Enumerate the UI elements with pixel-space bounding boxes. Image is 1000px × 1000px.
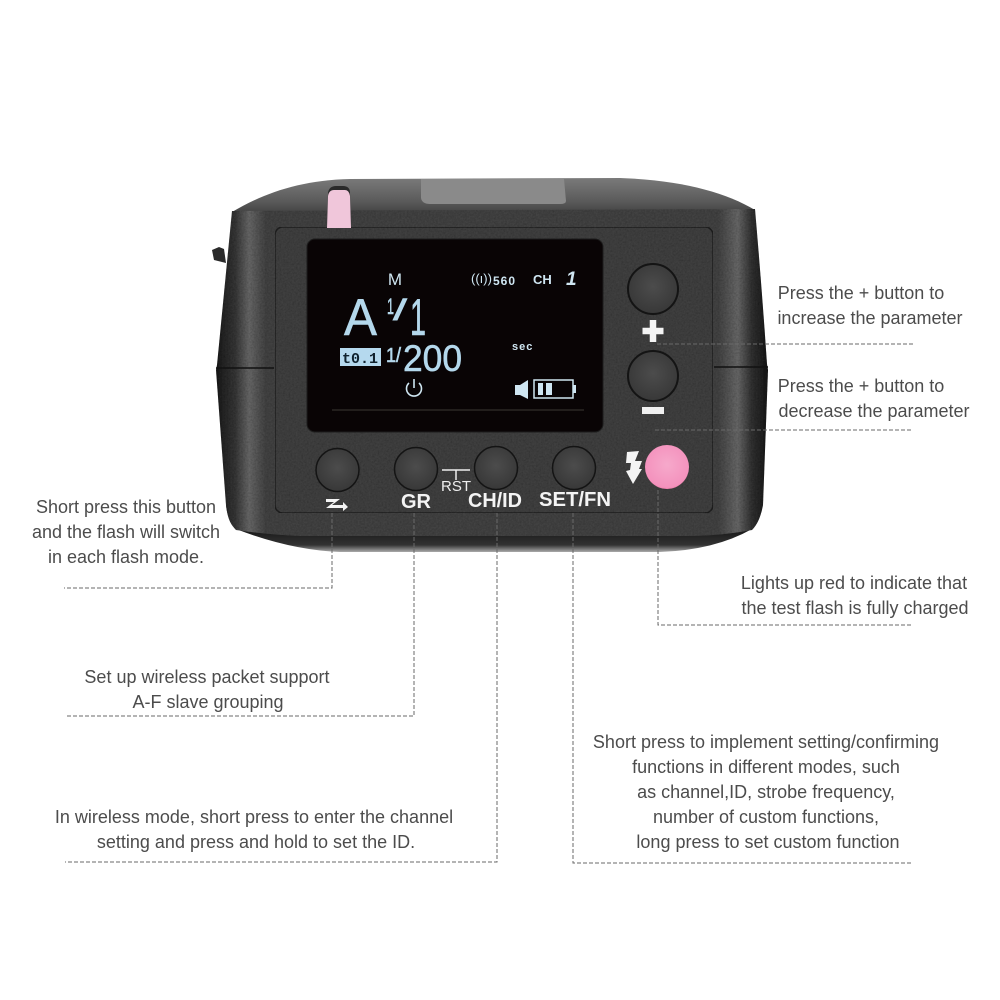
flash unit device bbox=[212, 178, 768, 552]
caption: increase line 2: increase the parameter bbox=[777, 308, 963, 328]
channel label: CH bbox=[533, 272, 552, 287]
caption: SET/FN: Short press to implement setting/confirming bbox=[593, 732, 939, 752]
caption: CH/ID bbox=[55, 807, 453, 852]
left side latch bbox=[212, 247, 226, 263]
top cap bbox=[232, 178, 755, 225]
ratio small 1: 1 bbox=[387, 294, 394, 319]
mode switch icon bbox=[326, 499, 348, 511]
power icon bbox=[407, 379, 422, 396]
sec label: sec bbox=[512, 341, 533, 353]
faint lcd lines bbox=[332, 409, 584, 411]
button minus bbox=[628, 351, 678, 401]
speaker and battery icon bbox=[515, 380, 576, 399]
caption: test flash bbox=[741, 573, 969, 618]
caption: GR bbox=[84, 667, 330, 712]
caption: SET/FN: number of custom functions, bbox=[653, 807, 879, 827]
RST label bbox=[441, 470, 471, 495]
caption: decrease: Press the + button to bbox=[778, 376, 944, 396]
leader lines bbox=[64, 344, 914, 863]
shutter small 1/: 1/ bbox=[386, 345, 401, 367]
GR button bbox=[394, 448, 438, 490]
mode button bbox=[316, 448, 359, 492]
lower bevel bbox=[226, 505, 762, 552]
ratio slash: / bbox=[393, 294, 408, 327]
caption: test flash: Lights up red to indicate that bbox=[741, 573, 967, 593]
wireless icon: ((ı)) bbox=[471, 271, 492, 286]
LCD screen bbox=[307, 239, 603, 432]
caption: CH/ID: In wireless mode, short press to enter the channel bbox=[55, 807, 453, 827]
caption: CH/ID: setting and press and hold to set the ID. bbox=[97, 832, 415, 852]
shutter value 200: 200 bbox=[403, 338, 462, 379]
caption: GR: Set up wireless packet support bbox=[84, 667, 330, 687]
caption: decrease line 2: decrease the parameter bbox=[778, 401, 970, 421]
caption: test flash: the test flash is fully charged bbox=[741, 598, 969, 618]
caption: GR: A-F slave grouping bbox=[132, 692, 284, 712]
caption: SET/FN: functions in different modes, such bbox=[632, 757, 900, 777]
ratio large 1: 1 bbox=[410, 289, 426, 347]
pink slider bbox=[327, 186, 351, 228]
test flash pink button bbox=[645, 445, 689, 489]
caption: SET/FN bbox=[593, 732, 939, 852]
main body bbox=[216, 209, 768, 536]
caption: SET/FN: as channel,ID, strobe frequency, bbox=[637, 782, 895, 802]
560 label: 560 bbox=[493, 274, 515, 288]
hot shoe window bbox=[421, 179, 566, 204]
channel number: 1 bbox=[566, 269, 577, 290]
caption: mode switch: and the flash will switch bbox=[32, 522, 220, 542]
CH/ID label: CH/ID bbox=[468, 490, 522, 512]
RST label: RST bbox=[441, 478, 471, 495]
t0.1 badge: t0.1 bbox=[342, 351, 378, 368]
caption: mode switch: in each flash mode. bbox=[48, 547, 204, 567]
plus sign bbox=[642, 320, 664, 342]
power ratio A: A bbox=[344, 289, 377, 347]
CH/ID button bbox=[474, 446, 518, 490]
caption: increase: Press the + button to bbox=[778, 283, 944, 303]
side seams bbox=[216, 367, 768, 368]
flash bolt icon bbox=[626, 451, 642, 484]
GR label: GR bbox=[401, 491, 432, 513]
button plus bbox=[628, 264, 678, 314]
control panel bbox=[275, 227, 713, 513]
SET/FN button bbox=[552, 446, 596, 490]
minus sign bbox=[642, 407, 664, 414]
SET/FN label: SET/FN bbox=[539, 489, 611, 511]
caption: SET/FN: long press to set custom function bbox=[636, 832, 900, 852]
mode letter M: M bbox=[388, 270, 402, 289]
caption: mode switch: Short press this button bbox=[36, 497, 216, 517]
caption: mode switch bbox=[32, 497, 220, 567]
